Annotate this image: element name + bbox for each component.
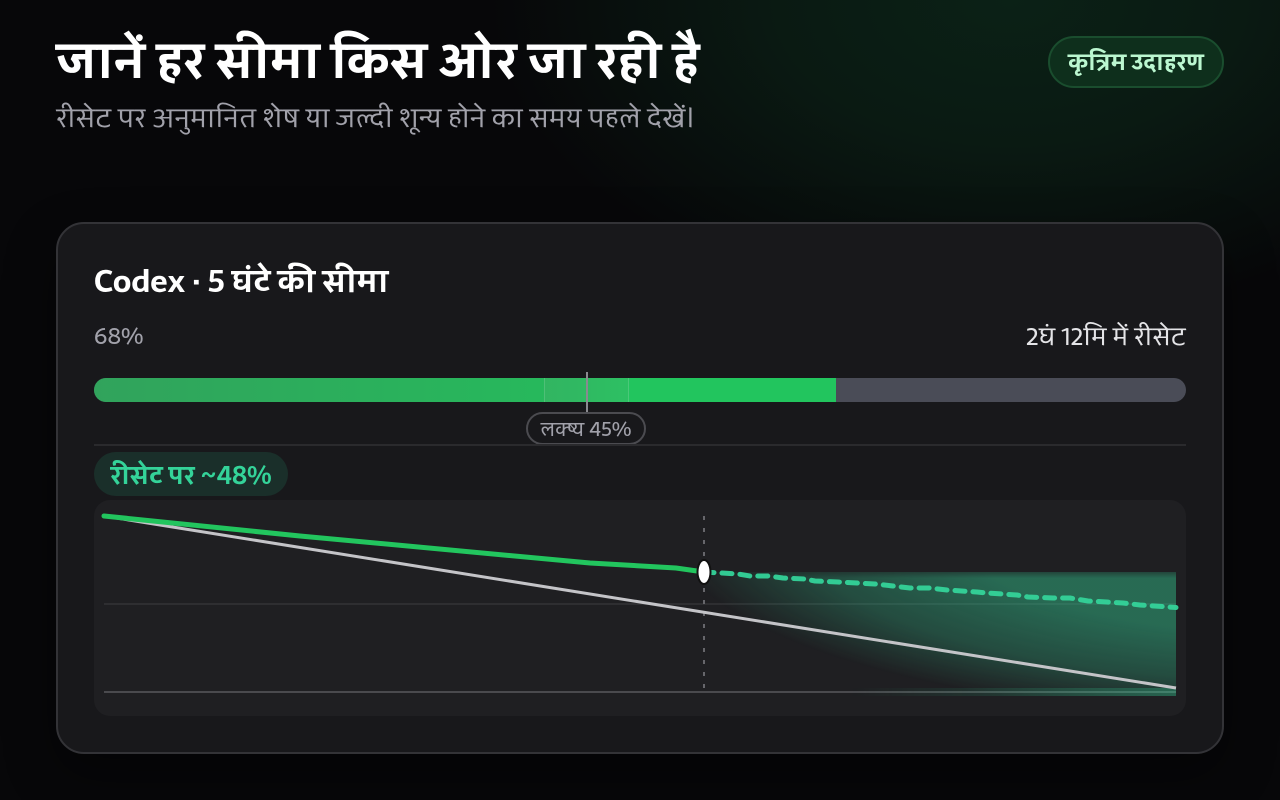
baseline bbox=[104, 691, 1176, 693]
target band bbox=[544, 378, 629, 402]
bar fill 68% bbox=[94, 378, 836, 402]
divider bbox=[94, 444, 1186, 446]
chart panel bbox=[102, 514, 1178, 696]
projected line bbox=[704, 572, 1176, 608]
actual usage line bbox=[104, 516, 704, 572]
target chip bbox=[526, 412, 646, 445]
target marker line bbox=[586, 372, 588, 412]
target chip: लक्ष्य 45% bbox=[541, 414, 631, 446]
projection range area bbox=[704, 572, 1176, 696]
grid line bbox=[104, 603, 1176, 605]
title: जानें हर सीमा किस ओर जा रही है bbox=[56, 22, 700, 101]
reference pace line bbox=[104, 516, 1176, 688]
badge: synthetic example: कृत्रिम उदाहरण bbox=[1068, 44, 1204, 81]
reset time: 2घं 12मि में रीसेट bbox=[1026, 313, 1186, 357]
percent used: 68% bbox=[94, 318, 143, 355]
card heading: Codex · 5 घंटे की सीमा bbox=[94, 257, 388, 307]
now marker line bbox=[703, 516, 705, 692]
projection badge: रीसेट पर ~48% bbox=[111, 456, 271, 496]
badge: synthetic example bbox=[1048, 36, 1224, 88]
subtitle: रीसेट पर अनुमानित शेष या जल्दी शून्य होने का समय पहले देखें। bbox=[56, 93, 695, 140]
chart bbox=[102, 514, 1178, 696]
panel: Codex limit card bbox=[56, 222, 1224, 754]
now marker dot bbox=[698, 560, 710, 584]
progress bar bbox=[94, 378, 1186, 402]
